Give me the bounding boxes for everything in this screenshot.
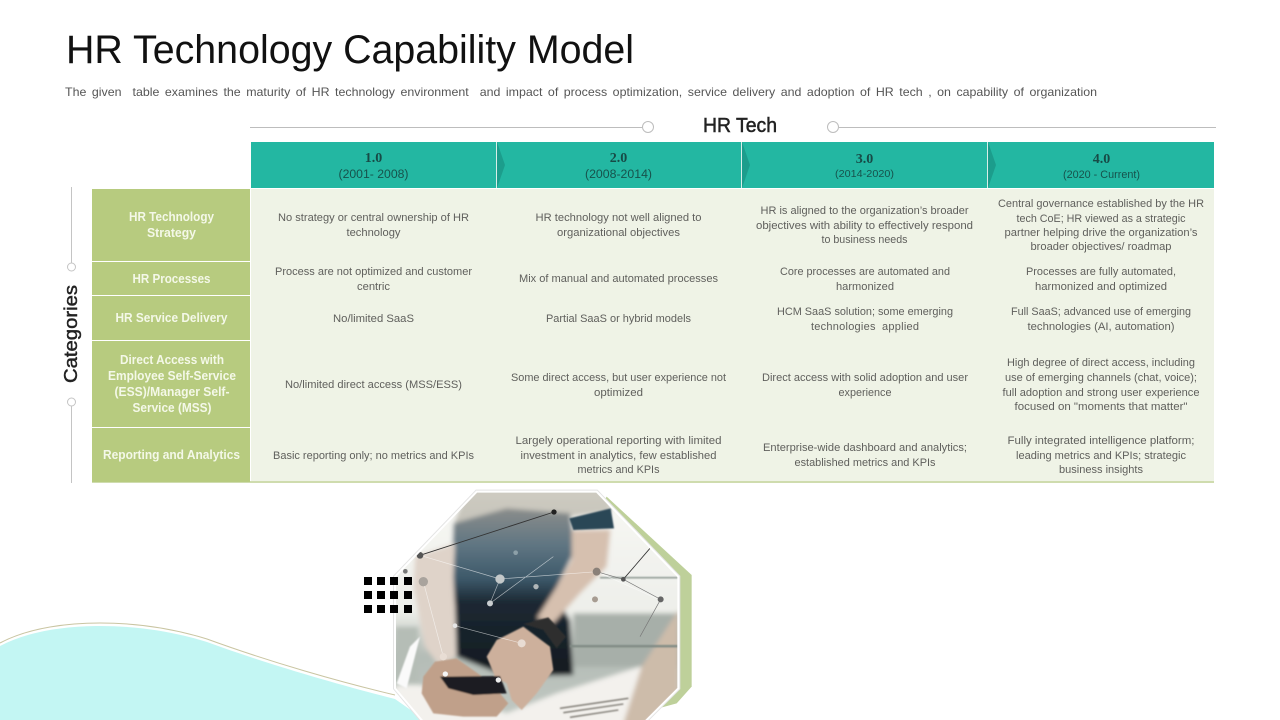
cell: Mix of manual and automated processes <box>519 273 719 285</box>
label: HR Service Delivery <box>92 296 250 340</box>
cell: centric <box>357 281 391 293</box>
cell: Enterprise-wide dashboard and analytics; <box>763 442 967 454</box>
cell: Direct access with solid adoption and user <box>762 372 968 384</box>
cell <box>1026 266 1176 293</box>
cell: tech CoE; HR viewed as a strategic <box>1016 213 1186 225</box>
header: 1.0: (2001- 2008) <box>338 169 409 181</box>
cell <box>516 435 722 476</box>
decorative wave <box>0 623 425 720</box>
cell: Partial SaaS or hybrid models <box>546 313 691 325</box>
header: 3.0: (2014-2020) <box>835 168 894 180</box>
label: HR Processes: HR Processes <box>132 272 211 286</box>
cell: High degree of direct access, including <box>1007 357 1195 369</box>
cell: metrics and KPIs <box>578 464 660 476</box>
cell: Fully integrated intelligence platform; <box>1008 435 1194 447</box>
label: HR Service Delivery: HR Service Delivery <box>116 311 228 325</box>
title: HR Technology Capability Model <box>66 28 634 72</box>
cell: technologies applied <box>811 321 919 333</box>
cell: technologies (AI, automation) <box>1028 321 1174 333</box>
column 2.0 cells <box>511 212 726 476</box>
cell: objectives with ability to effectively respond <box>756 220 973 232</box>
cell <box>278 212 469 239</box>
cell <box>998 198 1204 253</box>
crisp foreground <box>397 508 678 717</box>
cell <box>1002 357 1200 413</box>
header: 3.0 <box>835 152 894 180</box>
cell: business insights <box>1059 464 1143 476</box>
cell <box>763 442 967 469</box>
cell: Full SaaS; advanced use of emerging <box>1011 306 1191 318</box>
network lines <box>420 555 660 657</box>
header: 4.0: 4.0 <box>1093 152 1110 167</box>
cell: Core processes are automated and <box>780 266 950 278</box>
label: Direct Access <box>92 341 250 427</box>
cell: HCM SaaS solution; some emerging <box>777 306 953 318</box>
cell: leading metrics and KPIs; strategic <box>1016 450 1186 462</box>
cell: HR technology not well aligned to <box>536 212 702 224</box>
table body background <box>92 189 1214 483</box>
header: 2.0: 2.0 <box>610 151 627 166</box>
header: 4.0 <box>1063 152 1140 181</box>
cell <box>756 205 973 246</box>
label: Direct Access: Employee Self-Service <box>108 369 236 383</box>
cell: use of emerging channels (chat, voice); <box>1005 372 1197 384</box>
cell: No/limited SaaS <box>333 313 414 325</box>
header: 2.0 <box>585 151 652 181</box>
header: 2.0: (2008-2014) <box>585 169 652 181</box>
cell: organizational objectives <box>557 227 681 239</box>
cell: HR is aligned to the organization’s broader <box>760 205 969 217</box>
label: HR Technology Strategy <box>92 189 250 261</box>
octagon white edge <box>395 492 678 720</box>
label: Direct Access: (ESS)/Manager Self- <box>114 385 230 399</box>
cell <box>1008 435 1194 476</box>
cell: Processes are fully automated, <box>1026 266 1176 278</box>
heading: Categories with connector lines: Categories <box>61 285 81 383</box>
label: HR Technology Strategy: HR Technology <box>129 210 214 224</box>
cell <box>1011 306 1191 333</box>
cell: Some direct access, but user experience not <box>511 372 726 384</box>
label: Direct Access: Direct Access with <box>120 353 224 367</box>
cell: full adoption and strong user experience <box>1002 387 1200 399</box>
cell <box>275 266 472 293</box>
column 4.0 cells <box>998 198 1204 476</box>
cell: Process are not optimized and customer <box>275 266 472 278</box>
cell <box>780 266 950 293</box>
cell: harmonized and optimized <box>1035 281 1167 293</box>
table header row <box>251 142 1214 188</box>
cell: No strategy or central ownership of HR <box>278 212 469 224</box>
header separators <box>496 142 996 188</box>
header: 4.0: (2020 - Current) <box>1063 169 1140 181</box>
cell: optimized <box>594 387 643 399</box>
cell: Basic reporting only; no metrics and KPIs <box>273 450 474 462</box>
label: HR Technology Strategy: Strategy <box>147 226 196 240</box>
label: Reporting and Analytics <box>92 428 250 482</box>
cell: established metrics and KPIs <box>794 457 936 469</box>
cell: technology <box>346 227 401 239</box>
heading: HR Tech with connector lines <box>250 115 1216 137</box>
cell <box>762 372 968 399</box>
network dots <box>403 509 664 683</box>
cell: Largely operational reporting with limited <box>516 435 722 447</box>
blurred scene <box>396 492 678 720</box>
cell: No/limited direct access (MSS/ESS) <box>285 379 462 391</box>
cell: harmonized <box>836 281 894 293</box>
cell: experience <box>838 387 892 399</box>
label: Direct Access: Service (MSS) <box>132 401 212 415</box>
row labels <box>92 189 250 482</box>
cell: investment in analytics, few established <box>520 450 716 462</box>
label: Reporting and Analytics: Reporting and Analytics <box>103 448 240 462</box>
header: 1.0: 1.0 <box>365 151 382 166</box>
column 3.0 cells <box>756 205 973 469</box>
green octagon backing <box>573 497 692 713</box>
icon: black square dot grid <box>364 577 412 613</box>
label: HR Processes <box>92 262 250 295</box>
cell <box>511 372 726 399</box>
cell <box>777 306 953 333</box>
octagon frame <box>395 492 678 720</box>
cell <box>536 212 702 239</box>
header: 3.0: 3.0 <box>856 152 873 167</box>
cell: Central governance established by the HR <box>998 198 1204 210</box>
photo: hands with phone in octagon <box>383 483 692 720</box>
cell: to business needs <box>822 234 908 246</box>
cell: partner helping drive the organization’s <box>1004 227 1198 239</box>
cell: focused on "moments that matter" <box>1014 401 1188 413</box>
cell: broader objectives/ roadmap <box>1030 241 1172 253</box>
subtitle: The given table examines the maturity of HR technology environment and impact of process optimization, service delivery and adoption of HR tech , on capability of organization <box>65 85 1097 99</box>
column 1.0 cells <box>273 212 474 462</box>
header: 1.0 <box>338 151 409 181</box>
heading: Categories with connector lines <box>61 187 81 483</box>
heading: HR Tech with connector lines: HR Tech <box>703 115 777 137</box>
